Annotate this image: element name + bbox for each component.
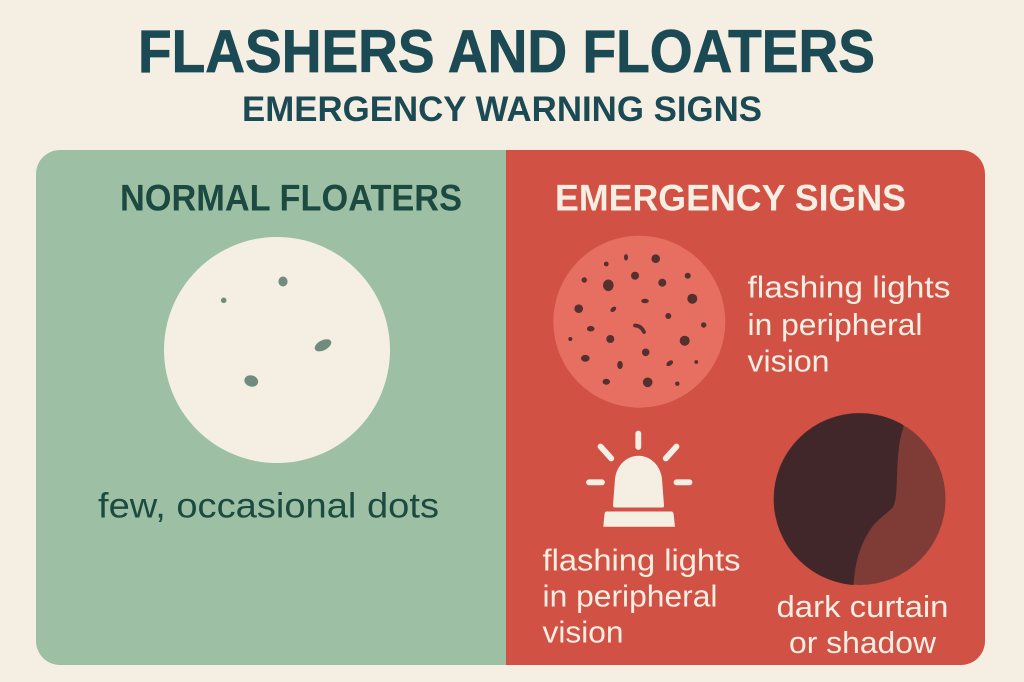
caption: flashing lights (lower): vision xyxy=(542,614,624,650)
caption: flashing lights (upper) xyxy=(748,270,950,378)
heading: emergency signs: EMERGENCY SIGNS xyxy=(555,178,906,218)
eye view with many floaters xyxy=(553,236,725,408)
caption: dark curtain xyxy=(776,589,948,660)
icon: alarm siren xyxy=(589,434,690,527)
caption: flashing lights (upper): flashing lights xyxy=(748,270,950,304)
panel: emergency signs xyxy=(506,150,985,665)
caption: flashing lights (upper): vision xyxy=(748,344,830,378)
panel: normal floaters xyxy=(36,150,506,665)
caption: few dots: few, occasional dots xyxy=(98,486,439,526)
title: FLASHERS AND FLOATERS xyxy=(138,18,875,85)
caption: dark curtain: dark curtain xyxy=(776,589,948,624)
subtitle: EMERGENCY WARNING SIGNS xyxy=(242,90,762,129)
caption: flashing lights (lower): in peripheral xyxy=(542,578,718,614)
heading: normal floaters: NORMAL FLOATERS xyxy=(120,178,462,218)
caption: dark curtain: or shadow xyxy=(789,625,937,660)
caption: flashing lights (lower) xyxy=(542,542,740,650)
eye view with few floaters xyxy=(164,237,390,463)
caption: flashing lights (lower): flashing lights xyxy=(542,542,740,578)
caption: flashing lights (upper): in peripheral xyxy=(748,307,922,342)
icon: dark curtain in vision xyxy=(774,413,946,585)
